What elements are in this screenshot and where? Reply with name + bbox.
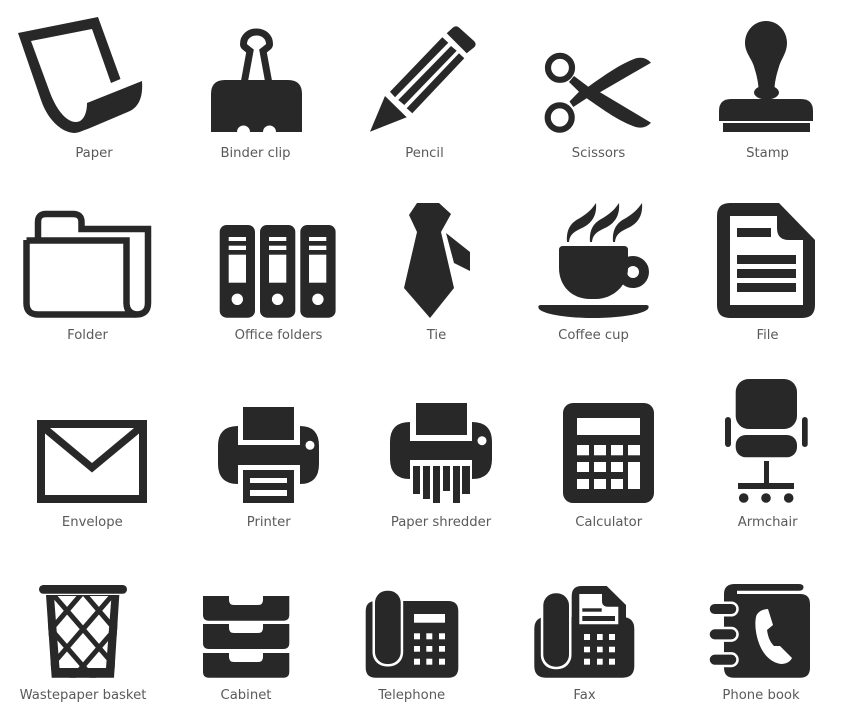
- icon: stamp: [719, 21, 813, 132]
- item: Pencil: [370, 26, 476, 161]
- icon: binder clip: [211, 32, 302, 138]
- label: Pencil: Pencil: [405, 146, 444, 161]
- item: Armchair: [725, 379, 808, 530]
- label: Binder clip: Binder clip: [220, 146, 291, 161]
- icon: wastepaper basket: [39, 585, 127, 680]
- item: Paper shredder: [390, 403, 492, 530]
- item: Stamp: [719, 21, 813, 161]
- item: Fax: [534, 586, 634, 703]
- label: Phone book: Phone book: [722, 688, 800, 703]
- item: Office folders: [220, 225, 336, 343]
- icon: envelope: [37, 420, 147, 503]
- label: Tie: Tie: [426, 328, 446, 343]
- label: Wastepaper basket: Wastepaper basket: [20, 688, 146, 703]
- label: Fax: Fax: [573, 688, 596, 703]
- item: Binder clip: [211, 32, 302, 161]
- icon: paper shredder: [390, 403, 492, 503]
- label: Scissors: Scissors: [572, 146, 625, 161]
- label: Coffee cup: Coffee cup: [558, 328, 629, 343]
- label: Calculator: Calculator: [575, 515, 643, 530]
- label: File: File: [756, 328, 779, 343]
- icon: pencil: [370, 26, 476, 132]
- label: Stamp: Stamp: [746, 146, 789, 161]
- item: Paper: [18, 17, 142, 161]
- label: Paper: Paper: [75, 146, 113, 161]
- icon: office folders: [220, 225, 336, 318]
- item: File: [717, 203, 815, 343]
- label: Armchair: Armchair: [738, 515, 798, 530]
- icon: paper: [18, 17, 142, 133]
- icon: cabinet: [203, 596, 289, 678]
- icon: handset: [755, 609, 792, 664]
- icon: file: [717, 203, 815, 318]
- icon: scissors: [548, 56, 651, 130]
- label: Office folders: Office folders: [235, 328, 323, 343]
- icon: armchair: [725, 379, 808, 503]
- label: Envelope: Envelope: [62, 515, 123, 530]
- icon: calculator: [563, 403, 654, 503]
- item: Coffee cup: [538, 203, 649, 343]
- item: Printer: [218, 407, 319, 530]
- label: Folder: Folder: [67, 328, 108, 343]
- item: Scissors: [548, 56, 651, 161]
- label: Paper shredder: Paper shredder: [391, 515, 492, 530]
- icon: fax: [534, 586, 634, 678]
- item: Wastepaper basket: [20, 585, 146, 703]
- icon: phone book: [708, 584, 810, 678]
- item: Folder: [26, 214, 148, 343]
- item: Cabinet: [203, 596, 289, 703]
- icon: coffee cup: [538, 203, 649, 318]
- icon: tie: [404, 203, 470, 318]
- label: Printer: Printer: [247, 515, 291, 530]
- label: Cabinet: Cabinet: [221, 688, 271, 703]
- item: Phone book: [708, 584, 810, 703]
- item: Telephone: [366, 588, 458, 703]
- item: Envelope: [37, 420, 147, 530]
- item: Calculator: [563, 403, 654, 530]
- icon: telephone: [366, 588, 458, 678]
- icon: folder: [26, 214, 148, 314]
- item: Tie: [404, 203, 470, 343]
- label: Telephone: Telephone: [377, 688, 445, 703]
- icon: printer: [218, 407, 319, 503]
